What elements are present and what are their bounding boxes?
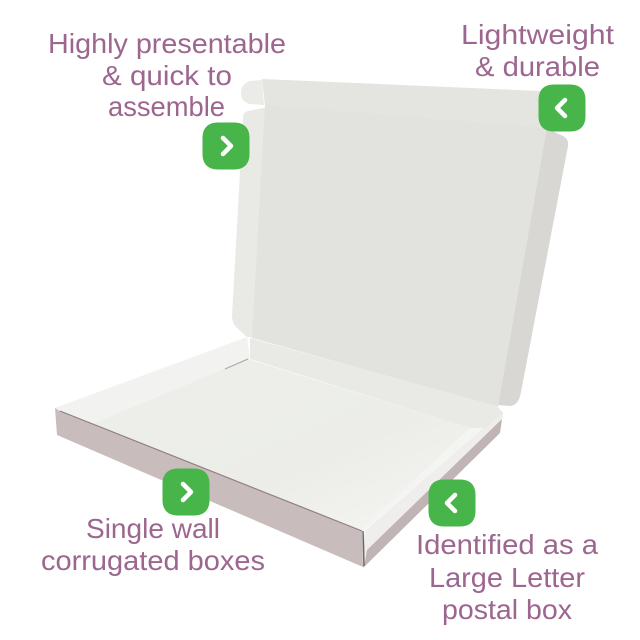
label text: Highly presentable bbox=[48, 28, 286, 59]
lid left flap bbox=[232, 108, 266, 337]
label text: corrugated boxes bbox=[41, 545, 265, 576]
icon: left chevron badge bbox=[428, 480, 476, 526]
callout: large letter bbox=[416, 480, 598, 625]
label text bbox=[41, 513, 265, 576]
label text bbox=[48, 28, 286, 122]
icon: right chevron badge bbox=[202, 122, 250, 170]
fold line bbox=[225, 359, 248, 369]
open box illustration bbox=[55, 79, 568, 568]
right outer face bbox=[363, 412, 503, 568]
label text: Single wall bbox=[86, 513, 220, 544]
lid top flap bbox=[262, 79, 552, 129]
label text: Identified as a bbox=[416, 529, 598, 560]
front outer face bbox=[55, 408, 363, 567]
label text: Lightweight bbox=[461, 19, 614, 50]
label text: postal box bbox=[442, 594, 572, 625]
label text: & quick to bbox=[102, 60, 232, 91]
lid main panel bbox=[252, 105, 547, 407]
icon: right chevron badge bbox=[162, 468, 210, 516]
label text: Large Letter bbox=[429, 562, 585, 593]
right bevel bbox=[364, 412, 503, 567]
inner front edge line bbox=[60, 411, 362, 531]
lid right flap bbox=[497, 128, 568, 406]
back wall bbox=[250, 338, 503, 428]
callout: highly presentable bbox=[48, 28, 286, 170]
floor bbox=[90, 359, 470, 531]
lid top tab bbox=[241, 80, 264, 105]
corner edge bbox=[363, 531, 364, 566]
label text bbox=[461, 19, 614, 82]
icon: left chevron badge bbox=[538, 84, 586, 132]
label text: assemble bbox=[108, 91, 225, 122]
callout: lightweight and durable bbox=[461, 19, 614, 132]
label text: & durable bbox=[475, 51, 600, 82]
right wall inner bbox=[360, 412, 503, 531]
callout: single wall bbox=[41, 468, 265, 576]
left wall bbox=[55, 337, 250, 426]
label text bbox=[416, 529, 598, 625]
